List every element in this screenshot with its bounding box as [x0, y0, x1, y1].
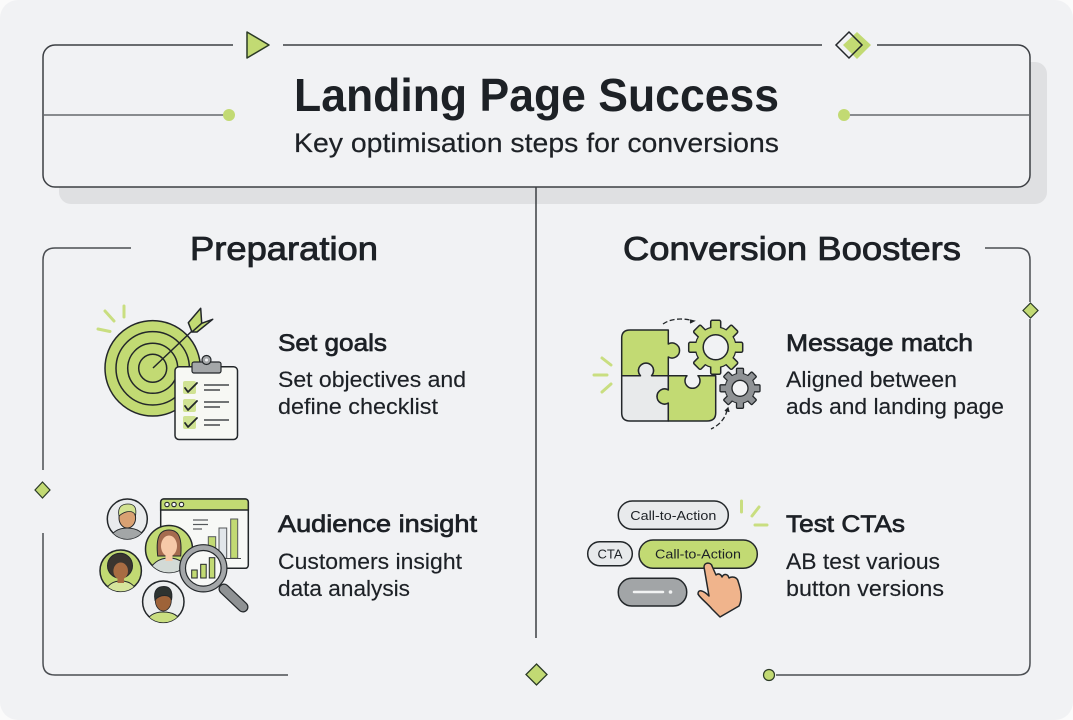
sparks [742, 501, 767, 525]
step: message match [786, 330, 1004, 419]
dashed arrows [663, 319, 729, 429]
button: gray [618, 578, 687, 606]
panel: conversion boosters [588, 231, 1038, 680]
right connector with dot [838, 109, 1030, 121]
button: call to action outline [618, 501, 728, 529]
header shadow [59, 62, 1047, 204]
step: set goals: Set objectives and [278, 367, 466, 392]
bottom centre diamond [526, 664, 547, 685]
center divider [535, 187, 537, 638]
person: blond man [107, 499, 147, 542]
icon: CTA buttons [588, 501, 767, 617]
step: test CTAs [786, 511, 944, 601]
left connector with dot [43, 109, 235, 121]
step: audience insight [278, 511, 477, 601]
person: man with dark hair [143, 581, 184, 625]
step: set goals: Set goals [278, 330, 387, 357]
step: set goals [278, 330, 466, 419]
heading: preparation: Preparation [190, 231, 378, 268]
icon: audience and analytics [100, 499, 248, 625]
button: call to action green [639, 540, 757, 568]
icon: magnifying glass [183, 548, 243, 607]
subtitle: Key optimisation steps for conversions [294, 128, 779, 158]
panel: preparation [35, 231, 477, 675]
title: Landing Page Success [294, 69, 779, 121]
panel: header [43, 32, 1047, 204]
icon: puzzle and gears [594, 319, 760, 429]
step: message match: ads and landing page [786, 394, 1004, 419]
icon: double diamond [836, 32, 871, 59]
step: set goals: define checklist [278, 394, 438, 419]
step: test CTAs: AB test various [786, 549, 940, 574]
button: CTA: CTA [597, 546, 623, 562]
button: call to action green: Call-to-Action [655, 546, 741, 562]
icon: large gear [689, 320, 743, 374]
step: message match: Aligned between [786, 367, 957, 392]
left panel frame [35, 248, 288, 675]
step: test CTAs: Test CTAs [786, 511, 905, 538]
person: woman centre [146, 526, 192, 576]
step: message match: Message match [786, 330, 973, 357]
step: audience insight: Audience insight [278, 511, 477, 538]
step: audience insight: Customers insight [278, 549, 462, 574]
header box [43, 45, 1030, 187]
icon: pointing hand [698, 563, 741, 617]
button: call to action outline: Call-to-Action [630, 508, 716, 523]
heading: conversion boosters: Conversion Boosters [623, 231, 961, 268]
step: audience insight: data analysis [278, 576, 410, 601]
icon: play triangle [247, 32, 269, 58]
icon: target and clipboard [98, 306, 238, 440]
step: test CTAs: button versions [786, 576, 944, 601]
right panel frame [764, 248, 1038, 680]
icon: small gear [720, 368, 760, 408]
button: CTA [588, 542, 632, 566]
person: woman with curly hair [100, 550, 141, 593]
